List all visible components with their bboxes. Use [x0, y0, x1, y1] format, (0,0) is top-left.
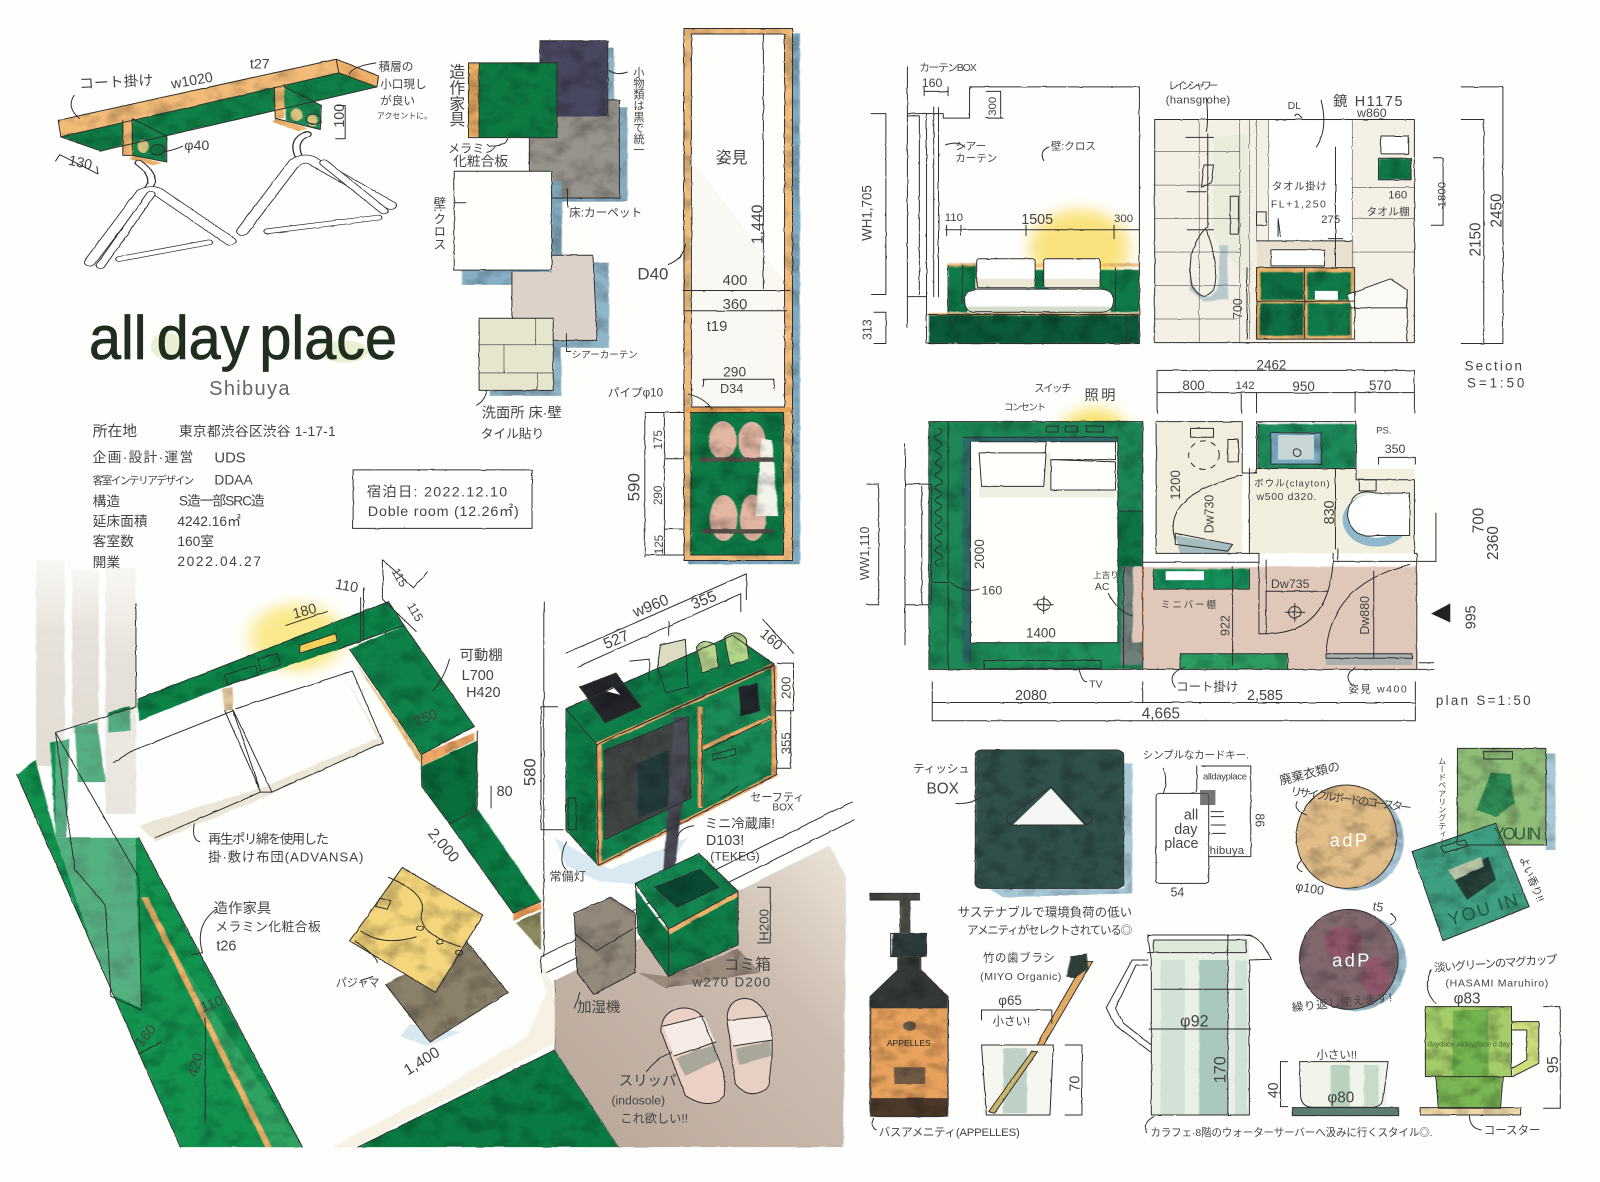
left section: bedroom elevation: 110	[945, 212, 963, 224]
recycled board coasters: 廃棄衣類の	[1278, 759, 1341, 788]
overall height dimensions and section caption: 2450	[1488, 194, 1505, 227]
toothbrush and glass: 70	[1068, 1076, 1084, 1092]
building facts: DDAA	[214, 473, 253, 488]
right section: bathroom elevation	[1155, 80, 1448, 343]
plan labels: 上吉り	[1093, 570, 1119, 580]
card key: alldayplace	[1203, 771, 1247, 782]
pairing tea packs: YOU IN	[1446, 890, 1520, 930]
plan width dimensions: 2462	[1257, 357, 1286, 372]
plan labels: 995	[1464, 605, 1480, 629]
amenity bottle: バスアメニティ(APPELLES)	[879, 1126, 1020, 1139]
green mug: daydace alldayplace d day	[1428, 1040, 1510, 1049]
overall height dimensions and section caption	[1461, 87, 1524, 390]
amenity bottle	[870, 893, 1020, 1139]
green mug: (HASAMI Maruhiro)	[1445, 978, 1548, 990]
room annotations	[132, 566, 513, 1079]
green mug: 95	[1545, 1056, 1562, 1073]
pairing tea packs	[1412, 748, 1555, 941]
window curtains	[36, 560, 136, 814]
stay info box: 宿泊日: 2022.12.10	[367, 484, 507, 501]
pairing tea packs: ムードペアリングティー	[1438, 757, 1447, 846]
mirror dimensions: t19	[707, 319, 727, 335]
cabinet annotations: 527	[601, 627, 631, 653]
building facts: 客室インテリアデザイン	[93, 474, 194, 487]
green mug: 淡いグリーンのマグカップ	[1434, 952, 1558, 975]
ceiling light glow	[250, 604, 344, 671]
recycled board coasters: t5	[1372, 899, 1385, 915]
left section: bedroom elevation: カーテンBOX	[919, 62, 977, 74]
plan overall dimensions: 4,665	[1142, 706, 1180, 723]
plan labels: 160	[982, 583, 1002, 597]
right section: bathroom elevation: タオル掛け	[1272, 180, 1327, 193]
coat rack labels: 積層の	[379, 59, 413, 73]
right section: bathroom elevation: w860	[1356, 106, 1387, 120]
panel: amenities	[870, 748, 1562, 1139]
mirror dimensions: 290	[652, 485, 665, 505]
room annotations: 110	[198, 993, 226, 1016]
room annotations: 再生ポリ綿を使用した	[208, 831, 329, 847]
coat rack labels: t27	[250, 56, 270, 72]
plan labels: 700	[1471, 508, 1488, 533]
cabinet annotations: w960	[630, 591, 672, 622]
folded pajamas	[350, 867, 508, 1042]
coat rack labels: アクセントに。	[377, 111, 432, 120]
swatch labels: 造作家具	[447, 64, 465, 127]
amenity note: サステナブルで環境負荷の低い	[958, 905, 1132, 920]
plan width dimensions: 570	[1369, 378, 1391, 393]
mirror dimensions: 姿見	[716, 149, 748, 167]
hangers	[90, 134, 391, 266]
carafe: カラフェ·8階のウォーターサーバーへ汲みに行くスタイル◎.	[1150, 1126, 1433, 1139]
bed shadow and mattress	[139, 675, 558, 1147]
right section: bathroom elevation: 1800	[1436, 182, 1448, 207]
card key: 86	[1253, 813, 1267, 827]
recycled board coasters	[1278, 759, 1412, 1015]
room annotations: 1,400	[401, 1044, 443, 1079]
small bowl on coaster	[1266, 1048, 1399, 1116]
amenity bottle: APPELLES	[887, 1038, 931, 1048]
building facts: 企画·設計·運営	[93, 450, 193, 465]
room annotations: 掛·敷け布団(ADVANSA)	[208, 848, 363, 864]
plan labels: w500 d320.	[1256, 491, 1316, 503]
swatch labels: メラミン	[448, 141, 497, 155]
room annotations: 420	[185, 1051, 207, 1079]
amenity note	[958, 905, 1132, 937]
mirror dimensions: 175	[652, 430, 665, 450]
carpet floor and baseboard	[541, 802, 855, 1147]
room annotations: メラミン化粧合板	[215, 919, 321, 934]
room annotations: 115	[389, 566, 411, 590]
mirror dimensions: 590	[625, 473, 644, 501]
plan labels: Dw735	[1271, 577, 1310, 591]
plan labels: コンセント	[1004, 403, 1046, 414]
toothbrush and glass: (MIYO Organic)	[980, 971, 1061, 983]
panel: section and plan drawings	[858, 62, 1531, 723]
room annotations: L700	[462, 668, 494, 684]
plan width dimensions: 950	[1292, 379, 1315, 394]
title: all day place: all day place	[89, 304, 397, 373]
small bowl on coaster: 40	[1266, 1082, 1282, 1098]
plan labels: 姿見 w400	[1348, 683, 1407, 696]
green mug: コースター	[1484, 1124, 1541, 1137]
swatch labels: タイル貼り	[481, 427, 544, 441]
plan overall dimensions: 2080	[1015, 688, 1047, 704]
amenity note: アメニティがセレクトされている◎	[967, 923, 1132, 937]
swatch labels: 洗面所 床·壁	[482, 404, 562, 421]
left section: bedroom elevation: 壁:クロス	[1051, 140, 1096, 152]
building facts: UDS	[214, 451, 246, 466]
cabinet annotations: D103!	[706, 833, 744, 849]
humidifier: 加湿機	[577, 999, 620, 1016]
building facts	[93, 423, 336, 570]
coat rack labels	[56, 56, 432, 174]
plan labels: WW1,110	[858, 527, 872, 580]
plan labels: Dw880	[1358, 596, 1372, 635]
card key: 54	[1170, 886, 1184, 900]
plan labels: ボウル(clayton)	[1254, 478, 1330, 489]
right section: bathroom elevation: (hansgrohe)	[1166, 94, 1230, 106]
plan labels: 1200	[1168, 470, 1183, 500]
swatch labels: 小物類は黒で統一	[632, 66, 644, 155]
coat rack labels: 100	[332, 104, 348, 128]
plan labels: 1400	[1026, 625, 1056, 640]
tissue box: BOX	[927, 780, 959, 797]
slippers: これ欲しい!!	[620, 1112, 688, 1126]
swatch labels: 床:カーペット	[569, 206, 642, 219]
card key	[1143, 749, 1267, 900]
cabinet annotations: 160	[757, 626, 785, 654]
room annotations: 250	[412, 706, 440, 730]
pairing tea packs: YOU IN	[1493, 823, 1541, 843]
plan overall dimensions	[932, 682, 1531, 723]
room annotations: 造作家具	[214, 900, 271, 917]
building facts: 4242.16㎡	[177, 514, 241, 529]
right section: bathroom elevation: 鏡 H1175	[1333, 93, 1402, 110]
slippers: (indosole)	[611, 1093, 665, 1107]
mirror dimensions: 360	[723, 297, 747, 313]
toothbrush and glass: 竹の歯ブラシ	[983, 951, 1055, 965]
right section: bathroom elevation: DL	[1288, 100, 1301, 112]
plan labels: 922	[1218, 615, 1232, 636]
cabinet annotations: 常備灯	[549, 870, 586, 884]
room annotations: 180	[291, 601, 318, 623]
coat rack labels: 130	[67, 153, 94, 174]
left section: bedroom elevation: 160	[922, 76, 943, 90]
floor plan	[858, 382, 1502, 696]
plan width dimensions: 142	[1236, 380, 1255, 392]
plan width dimensions	[1157, 357, 1414, 413]
card key: all	[1184, 807, 1198, 823]
left section: bedroom elevation: 300	[1114, 213, 1133, 225]
mirror dimensions: D40	[637, 264, 668, 283]
mirror dimensions: 1,440	[749, 204, 766, 244]
coat rack labels: コート掛け	[79, 72, 154, 93]
recycled board coasters: adP	[1332, 951, 1369, 971]
coat rack labels: w1020	[169, 70, 214, 93]
card key: hibuya	[1210, 845, 1245, 857]
left section: bedroom elevation: 313	[861, 319, 875, 340]
cabinet with fridge	[520, 574, 804, 957]
left section: bedroom elevation: カーテン	[955, 152, 997, 164]
coat rack labels: φ40	[184, 138, 209, 154]
swatch labels: シアーカーテン	[572, 350, 638, 361]
right section: bathroom elevation: FL+1,250	[1271, 198, 1326, 210]
tissue box: ティッシュ	[913, 764, 970, 776]
toothbrush and glass: φ65	[998, 993, 1022, 1008]
building facts: 所在地	[93, 423, 137, 440]
pairing tea packs: よい香り!!	[1517, 855, 1546, 904]
recycled board coasters: 繰り返し使えます!	[1291, 990, 1393, 1015]
plan labels: ミニバー棚	[1161, 599, 1216, 611]
plan labels: 350	[1385, 442, 1406, 456]
cabinet annotations: セーフティ	[750, 791, 804, 804]
plan labels: コート掛け	[1176, 679, 1238, 694]
panel: isometric guest room	[17, 560, 855, 1147]
carafe: φ92	[1180, 1013, 1209, 1031]
green mug	[1420, 952, 1562, 1137]
building facts: 構造	[93, 494, 120, 509]
cabinet annotations: 355	[689, 588, 719, 613]
green mug: φ83	[1454, 990, 1481, 1007]
room annotations: 可動棚	[459, 647, 503, 664]
carafe: 170	[1211, 1056, 1229, 1083]
card key: place	[1164, 836, 1199, 852]
swatch labels: 壁:クロス	[431, 196, 446, 251]
material swatches	[431, 41, 644, 441]
card key: day	[1174, 822, 1198, 838]
small bowl on coaster: φ80	[1327, 1090, 1354, 1107]
recycled board coasters: リサイクルボードのコースター	[1290, 785, 1412, 815]
building facts: 東京都渋谷区渋谷 1-17-1	[179, 424, 336, 439]
card key: シンプルなカードキー.	[1143, 749, 1249, 761]
overall height dimensions and section caption: 2150	[1467, 223, 1484, 257]
room annotations: 80	[497, 784, 513, 800]
plan labels: スイッチ	[1034, 382, 1071, 394]
right section: bathroom elevation: タオル棚	[1367, 205, 1410, 218]
left section: bedroom elevation: WH1,705	[860, 185, 875, 241]
cabinet annotations: ミニ冷蔵庫!	[705, 816, 775, 831]
room annotations: 160	[132, 1022, 160, 1051]
recycled board coasters: adP	[1330, 831, 1367, 851]
mirror dimensions: 290	[723, 365, 746, 380]
slippers: スリッパ	[619, 1073, 676, 1090]
toothbrush and glass	[980, 951, 1092, 1115]
tissue box	[913, 750, 1132, 897]
trash bin	[635, 854, 772, 989]
recycled board coasters: φ100	[1294, 879, 1325, 898]
overall height dimensions and section caption: S=1:50	[1467, 375, 1524, 390]
room annotations: パジャマ	[336, 976, 380, 989]
toothbrush and glass: 小さい!	[993, 1015, 1030, 1028]
slippers	[611, 998, 772, 1126]
room annotations: 110	[334, 577, 359, 596]
plan labels: PS.	[1376, 426, 1392, 437]
full length mirror elevation	[608, 28, 800, 564]
coat rack sketch	[56, 56, 432, 266]
mirror dimensions: 400	[723, 273, 747, 289]
plan width dimensions: 800	[1182, 378, 1205, 393]
plan labels	[858, 382, 1502, 696]
plan overall dimensions: 2,585	[1247, 688, 1283, 704]
mirror dimensions	[608, 149, 766, 554]
plan labels: 2360	[1485, 526, 1502, 560]
plan labels: Dw730	[1203, 495, 1217, 533]
room annotations: t26	[216, 939, 236, 955]
plan overall dimensions: plan S=1:50	[1436, 693, 1531, 708]
room annotations: 115	[404, 600, 426, 624]
trash bin: ゴミ箱	[724, 954, 771, 973]
mirror dimensions: D34	[720, 382, 743, 396]
right section: bathroom elevation: 700	[1231, 298, 1245, 319]
overall height dimensions and section caption: Section	[1465, 358, 1522, 373]
left section: bedroom elevation	[860, 62, 1139, 344]
coat rack labels: 小口現し	[380, 78, 427, 91]
cabinet annotations: (TEKEG)	[710, 850, 760, 864]
right section: bathroom elevation: レインシャワー	[1168, 80, 1218, 92]
plan labels: 2000	[972, 539, 987, 569]
right section: bathroom elevation: 160	[1388, 189, 1407, 201]
building facts: 客室数	[93, 533, 134, 549]
swatch labels: 化粧合板	[453, 154, 508, 169]
trash bin: w270 D200	[692, 974, 770, 989]
stay info box	[353, 470, 532, 528]
swatch labels	[431, 64, 644, 441]
left section: bedroom elevation: 1505	[1021, 212, 1053, 228]
cabinet annotations: BOX	[772, 803, 794, 814]
carafe	[1106, 935, 1433, 1139]
building facts: 開業	[93, 555, 120, 570]
room annotations: 2,000	[424, 825, 462, 866]
mirror dimensions: パイプφ10	[608, 387, 664, 400]
cabinet annotations	[520, 588, 804, 884]
plan labels: 830	[1322, 500, 1338, 524]
humidifier	[574, 897, 635, 1016]
left section: bedroom elevation: 300	[987, 97, 999, 116]
built-in green furniture	[17, 602, 619, 1147]
building facts: 160室	[177, 534, 214, 549]
plan labels: AC	[1095, 581, 1110, 593]
plan labels: TV	[1089, 678, 1103, 690]
coat rack labels: が良い	[380, 93, 415, 107]
building facts: 2022.04.27	[177, 554, 261, 569]
small bowl on coaster: 小さい!!	[1316, 1048, 1357, 1061]
cabinet annotations: 355	[779, 732, 794, 754]
mirror dimensions: 125	[653, 535, 666, 554]
right section: bathroom elevation: 275	[1321, 214, 1340, 226]
panel: upper left sheet	[56, 28, 800, 570]
cabinet annotations: 200	[779, 677, 794, 699]
trash bin: H200	[757, 909, 772, 941]
room line work	[17, 560, 619, 1147]
building facts: S造一部SRC造	[179, 493, 265, 508]
room annotations: H420	[466, 685, 501, 701]
cabinet annotations: 580	[520, 758, 539, 786]
subtitle: Shibuya: Shibuya	[209, 378, 290, 400]
left section: bedroom elevation: シアー	[955, 140, 986, 152]
building facts: 延床面積	[93, 514, 148, 529]
window glass panel	[55, 604, 141, 1010]
stay info box: Doble room (12.26㎡)	[368, 503, 519, 520]
plan labels: 照明	[1084, 388, 1115, 404]
